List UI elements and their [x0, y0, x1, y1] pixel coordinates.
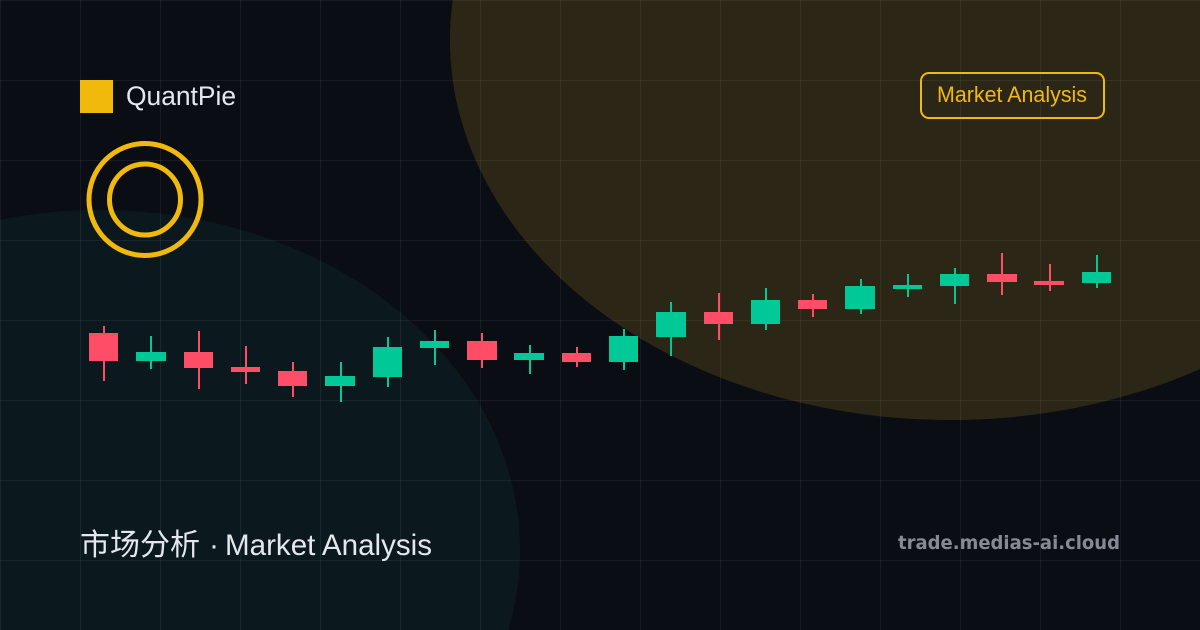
site url: trade.medias-ai.cloud — [898, 532, 1120, 554]
candlestick chart — [89, 253, 1111, 402]
candle 21 — [1034, 264, 1064, 291]
background shape: teal ellipse — [0, 210, 520, 630]
brand name: QuantPie — [126, 81, 236, 111]
logo square — [80, 80, 113, 113]
candle 11 — [562, 347, 591, 367]
candle 15 — [751, 288, 780, 330]
candle 7 — [373, 337, 402, 387]
candle 12 — [609, 329, 638, 370]
subtitle: 市场分析 — [80, 529, 200, 562]
candle 16 — [798, 294, 827, 317]
badge: Market Analysis: Market Analysis — [937, 82, 1087, 107]
logo — [80, 80, 236, 113]
candle 13 — [656, 302, 686, 356]
candle 4 — [231, 346, 260, 384]
candle 2 — [136, 336, 166, 369]
background shape: yellow ellipse — [450, 0, 1200, 420]
candle 17 — [845, 279, 875, 314]
candle 14 — [704, 293, 733, 340]
candle 10 — [514, 345, 544, 374]
badge: Market Analysis — [921, 73, 1104, 118]
candle 6 — [325, 362, 355, 402]
candle 20 — [987, 253, 1017, 295]
subtitle: Market Analysis — [225, 529, 432, 562]
icon: concentric rings — [89, 144, 201, 256]
subtitle: · — [209, 529, 219, 562]
candle 18 — [893, 274, 922, 297]
candle 22 — [1082, 255, 1111, 288]
candle 5 — [278, 362, 307, 397]
candle 19 — [940, 268, 969, 304]
candle 1 — [89, 326, 118, 381]
candle 8 — [420, 330, 449, 365]
candle 9 — [467, 333, 497, 368]
candle 3 — [184, 331, 213, 389]
